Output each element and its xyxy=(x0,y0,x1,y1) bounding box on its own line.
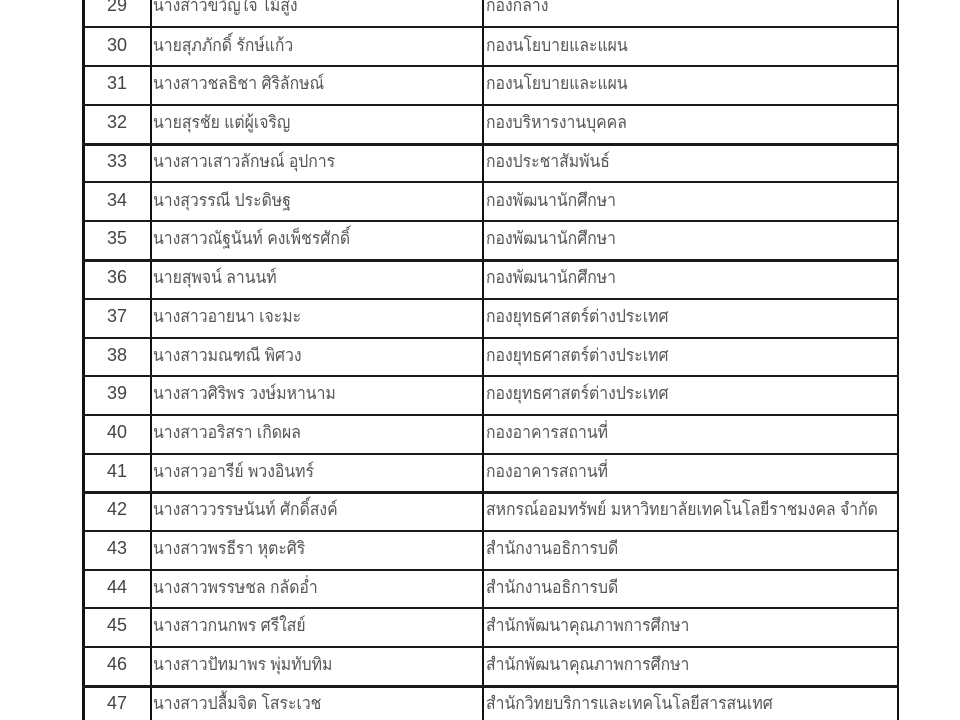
row 47 xyxy=(107,690,773,713)
row 30: กองนโยบายและแผน xyxy=(486,35,628,55)
row 43: นางสาวพรธีรา หุตะศิริ xyxy=(153,538,305,558)
row 38: กองยุทธศาสตร์ต่างประเทศ xyxy=(486,345,669,365)
row 38: 38 xyxy=(107,345,127,365)
row 38: นางสาวมณฑณี พิศวง xyxy=(153,345,302,365)
row 39 xyxy=(107,383,669,404)
row 40: 40 xyxy=(107,422,127,442)
row 44: นางสาวพรรษชล กลัดอ่ำ xyxy=(153,577,318,597)
row 41 xyxy=(107,459,608,481)
row 47: สำนักวิทยบริการและเทคโนโลยีสารสนเทศ xyxy=(486,693,773,713)
row 41: กองอาคารสถานที่ xyxy=(486,461,608,481)
row 39: นางสาวศิริพร วงษ์มหานาม xyxy=(153,383,336,403)
row 45: สำนักพัฒนาคุณภาพการศึกษา xyxy=(486,615,689,635)
row 34: กองพัฒนานักศึกษา xyxy=(486,190,616,210)
row 47: 47 xyxy=(107,693,127,713)
row 42: นางสาววรรษนันท์ ศักดิ์สงค์ xyxy=(153,499,338,519)
row 43 xyxy=(107,538,618,558)
row 36 xyxy=(107,267,616,288)
row 37 xyxy=(107,306,669,326)
row 35 xyxy=(107,226,616,248)
row 45 xyxy=(107,615,689,636)
row 46: นางสาวปัทมาพร พุ่มทับทิม xyxy=(153,654,332,674)
row 42: 42 xyxy=(107,499,127,519)
row 34: 34 xyxy=(107,190,127,210)
row 39: กองยุทธศาสตร์ต่างประเทศ xyxy=(486,383,669,403)
row 33: 33 xyxy=(107,151,127,171)
row 37: กองยุทธศาสตร์ต่างประเทศ xyxy=(486,306,669,326)
row 30 xyxy=(107,32,628,56)
row 37: นางสาวอายนา เจะมะ xyxy=(153,306,301,326)
row 37: 37 xyxy=(107,306,127,326)
row 36: กองพัฒนานักศึกษา xyxy=(486,267,616,287)
row 34: นางสุวรรณี ประดิษฐ xyxy=(153,190,291,210)
row 31 xyxy=(107,73,628,93)
row 46: สำนักพัฒนาคุณภาพการศึกษา xyxy=(486,654,689,674)
row 43: สำนักงานอธิการบดี xyxy=(486,538,618,558)
row 33: กองประชาสัมพันธ์ xyxy=(486,151,610,171)
row 40: นางสาวอริสรา เกิดผล xyxy=(153,422,301,442)
row 36: 36 xyxy=(107,267,127,287)
row 41: 41 xyxy=(107,461,127,481)
row 46 xyxy=(107,654,689,674)
row 32 xyxy=(107,112,627,132)
row 32: กองบริหารงานบุคคล xyxy=(486,112,627,132)
row 47: นางสาวปลื้มจิต โสระเวช xyxy=(153,693,321,713)
row 38 xyxy=(107,345,669,366)
row 41: นางสาวอารีย์ พวงอินทร์ xyxy=(153,461,314,481)
row 42 xyxy=(107,496,878,519)
row 46: 46 xyxy=(107,654,127,674)
row 35: กองพัฒนานักศึกษา xyxy=(486,228,616,248)
row 34 xyxy=(107,190,616,210)
row 44: 44 xyxy=(107,577,127,597)
row 31: 31 xyxy=(107,73,127,93)
row 30: 30 xyxy=(107,35,127,55)
row 40 xyxy=(107,420,608,442)
row 31: นางสาวชลธิชา ศิริลักษณ์ xyxy=(153,73,324,93)
row 40: กองอาคารสถานที่ xyxy=(486,422,608,442)
row 33 xyxy=(107,151,610,172)
row 29 xyxy=(107,0,548,16)
row 32: นายสุรชัย แต่ผู้เจริญ xyxy=(153,112,290,132)
row 32: 32 xyxy=(107,112,127,132)
row 30: นายสุภภักดิ์ รักษ์แก้ว xyxy=(153,35,293,55)
row 45: 45 xyxy=(107,615,127,635)
row 45: นางสาวกนกพร ศรีใสย์ xyxy=(153,615,306,635)
row 36: นายสุพจน์ ลานนท์ xyxy=(153,267,277,287)
row 35: นางสาวณัฐนันท์ คงเพ็ชรศักดิ์ xyxy=(153,228,350,248)
row 39: 39 xyxy=(107,383,127,403)
row 43: 43 xyxy=(107,538,127,558)
row 44: สำนักงานอธิการบดี xyxy=(486,577,618,597)
row 42: สหกรณ์ออมทรัพย์ มหาวิทยาลัยเทคโนโลยีราชมงคล จำกัด xyxy=(486,499,878,519)
row 33: นางสาวเสาวลักษณ์ อุปการ xyxy=(153,151,335,171)
row 35: 35 xyxy=(107,228,127,248)
row 44 xyxy=(107,575,618,597)
row 31: กองนโยบายและแผน xyxy=(486,73,628,93)
